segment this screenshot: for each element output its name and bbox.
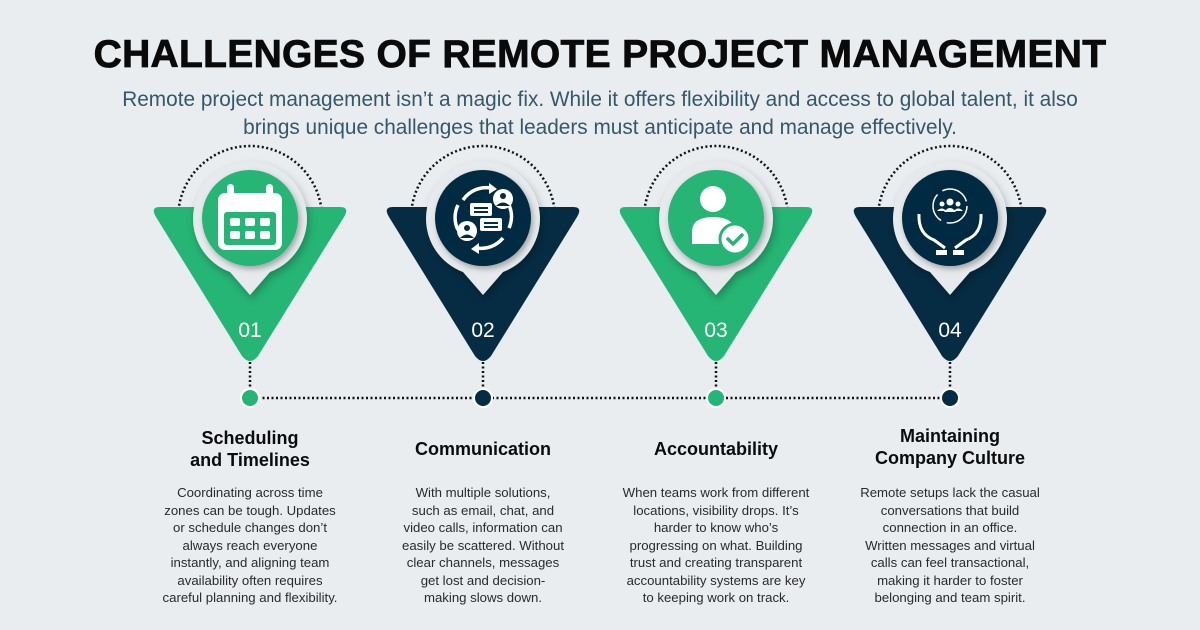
heading 4 [875, 426, 1025, 468]
text 4: making it harder to foster [877, 572, 1023, 588]
text 2: easily be scattered. Without [402, 538, 564, 552]
icon: person with check [692, 186, 750, 254]
text 1: availability often requires [177, 572, 323, 588]
marker 3: 03 [704, 319, 728, 342]
timeline line [258, 397, 942, 399]
marker 1: 01 [238, 319, 262, 342]
marker 1 [154, 146, 346, 407]
heading 1 [190, 428, 310, 470]
text 2: With multiple solutions, [416, 485, 550, 500]
heading 4: Maintaining [900, 426, 1000, 446]
text 4: conversations that build [881, 502, 1019, 518]
marker 2 [387, 146, 579, 407]
text 1 [163, 485, 337, 605]
text 2: such as email, chat, and [412, 502, 554, 518]
icon: communication cycle [455, 188, 511, 248]
text 2 [402, 485, 564, 605]
text 3: accountability systems are key [627, 572, 805, 588]
subtitle: Remote project management isn’t a magic fix. While it offers flexibility and access to global talent, it also [122, 88, 1078, 111]
heading 3: Accountability [654, 439, 778, 459]
text 1: careful planning and flexibility. [163, 590, 337, 605]
heading 2: Communication [415, 439, 551, 459]
text 1: always reach everyone [183, 538, 317, 552]
text 4 [860, 485, 1040, 605]
text 4: connection in an office. [883, 520, 1017, 535]
diagram graphics [154, 144, 1046, 408]
text 3: trust and creating transparent [630, 555, 802, 570]
heading 1: and Timelines [190, 450, 310, 470]
marker 2: 02 [471, 319, 495, 342]
icon: calendar [218, 184, 282, 250]
marker 4 [854, 146, 1046, 407]
text 1: zones can be tough. Updates [164, 502, 336, 518]
text 2: making slows down. [424, 590, 542, 605]
text 1: Coordinating across time [177, 485, 323, 500]
marker 4: 04 [938, 319, 962, 342]
heading 1: Scheduling [201, 428, 298, 448]
text 3: locations, visibility drops. It’s [633, 502, 799, 518]
text 4: belonging and team spirit. [874, 590, 1026, 605]
text 3: harder to know who’s [654, 520, 778, 535]
subtitle [122, 88, 1078, 139]
text 4: Written messages and virtual [865, 538, 1035, 552]
text 4: Remote setups lack the casual [860, 485, 1040, 500]
subtitle: brings unique challenges that leaders must anticipate and manage effectively. [243, 116, 957, 139]
title: CHALLENGES OF REMOTE PROJECT MANAGEMENT [94, 33, 1106, 76]
text 3: When teams work from different [623, 485, 809, 500]
text 3 [622, 485, 810, 605]
text 2: get lost and decision- [421, 572, 545, 588]
text 2: video calls, information can [403, 520, 563, 535]
heading 4: Company Culture [875, 448, 1025, 468]
text 3: progressing on what. Building [629, 538, 802, 552]
icon: hands holding team [919, 189, 981, 255]
text 1: or schedule changes don’t [173, 520, 327, 535]
text 4: calls can feel transactional, [871, 555, 1029, 570]
text 2: clear channels, messages [407, 555, 559, 570]
text 1: instantly, and aligning team [171, 555, 329, 570]
marker 3 [620, 146, 812, 407]
text 3: to keeping work on track. [643, 590, 789, 605]
